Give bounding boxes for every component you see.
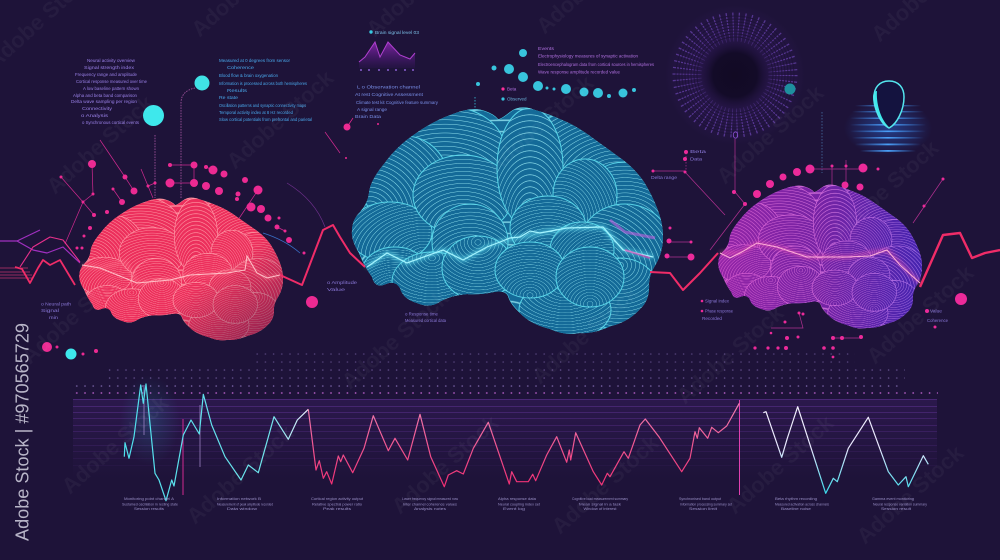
text block: top right of blue chain: Wave response amplitude recorded value <box>538 70 620 74</box>
waveform captions: Baseline noise <box>781 506 812 511</box>
text block: top left: Alpha and beta band comparison <box>73 93 137 98</box>
waveform captions: Measurement of peak amplitude recorded <box>217 502 273 506</box>
waveform captions: Event log <box>503 506 525 511</box>
text block: top centre: L o Observation channel <box>357 84 420 90</box>
text block: top left: Frequency range and amplitude <box>75 72 137 77</box>
waveform captions: Relative spectral power ratio <box>312 502 363 506</box>
pink node network: right brain <box>652 112 967 358</box>
waveform captions: Alpha response data <box>498 496 537 501</box>
waveform captions: Analysis notes <box>414 506 446 511</box>
watermark: Adobe Stock <box>722 410 839 519</box>
small text labels around brains: o Response time <box>405 312 439 316</box>
text block: top right of blue chain <box>538 46 655 74</box>
waveform captions <box>122 496 927 511</box>
watermark: Adobe Stock <box>57 390 174 499</box>
small text labels around brains: Measured cortical data <box>405 318 447 323</box>
text block: top centre-left: Oscillation patterns and synaptic connectivity maps <box>219 103 307 108</box>
waveform captions: Session results <box>134 506 164 511</box>
waveform captions: Beta rhythm recording <box>775 496 817 501</box>
right output wave <box>920 233 1000 287</box>
text block: top right of blue chain: Electrophysiology measures of synaptic activation <box>538 54 638 58</box>
text block: top centre: A signal range <box>357 107 387 112</box>
small text labels around brains: Data <box>690 156 703 162</box>
connector wave: blue to purple <box>650 253 718 290</box>
watermark: Adobe Stock <box>527 280 644 389</box>
waveform captions: Inter channel coherence values <box>403 502 457 506</box>
brain: red left <box>77 197 288 344</box>
text block: top centre-left: Blood flow & brain oxygenation <box>219 73 278 78</box>
text block: top left: Delta wave sampling per region <box>71 99 137 104</box>
text block: top left: Connectivity <box>82 106 113 111</box>
waveform captions: Measured activation across channels <box>775 502 829 506</box>
text block: top left: Signal strength index <box>84 65 135 70</box>
text block: top centre <box>355 84 439 119</box>
waveform captions: Lower frequency signal measured now <box>402 496 458 501</box>
brain: purple right <box>716 184 927 332</box>
waveform captions: Session limit <box>689 506 718 511</box>
waveform captions: Synchronised band output <box>679 496 722 501</box>
text block: top centre: At rest Cognitive Assessment <box>355 92 424 97</box>
brain: blue centre <box>348 106 671 340</box>
small text labels around brains: min <box>49 315 59 320</box>
watermark: Adobe Stock <box>337 285 454 394</box>
watermark: Adobe Stock <box>17 260 134 369</box>
text block: top left: Cortical response measured over time <box>76 79 147 84</box>
watermark: Adobe Stock <box>387 410 504 519</box>
watermark: Adobe Stock <box>547 430 664 539</box>
watermark: Adobe Stock <box>482 70 599 179</box>
shield icon with blue bars <box>844 80 932 156</box>
small text labels around brains: Value <box>930 308 943 314</box>
waveform captions: Session result <box>881 506 912 511</box>
stock image id: Adobe Stock | #970565729 <box>12 323 32 541</box>
waveform captions: Window of interest <box>584 506 617 511</box>
small text labels around brains: o Amplitude <box>327 280 358 285</box>
watermark: Adobe Stock <box>222 65 339 174</box>
white to cyan wave segment <box>763 407 928 493</box>
text block: top centre-left: Results <box>227 88 248 93</box>
text block: top left: A low baseline pattern shown <box>83 86 139 91</box>
dot matrix above the waveform <box>73 352 938 395</box>
text block: top left <box>71 58 147 125</box>
mini area chart <box>359 30 420 71</box>
waveform captions: Monitoring point channel A <box>124 496 174 501</box>
waveform captions: Peak results <box>323 506 351 511</box>
watermark: Adobe Stock <box>852 440 969 549</box>
watermark: Adobe Stock <box>827 135 944 244</box>
text block: top left: Neural activity overview <box>87 58 136 63</box>
waveform captions: Gamma event monitoring <box>872 496 914 501</box>
text block: top right of blue chain: Electroencephalogram data from cortical sources in hemispheres <box>538 62 655 67</box>
legend near blue chain: Observed <box>507 96 527 102</box>
legend near blue chain <box>501 86 527 102</box>
text block: top centre: Brain Data <box>355 114 382 119</box>
text block: top centre: Climate test kit Cognitive feature summary <box>356 100 439 105</box>
small text labels around brains: o Neural path <box>41 302 72 306</box>
legend near blue chain: Beta <box>507 86 517 92</box>
waveform captions: Mean signal in a task <box>579 502 621 506</box>
sunburst radial graphic <box>665 5 805 145</box>
text block: top centre-left: Measured at 0 degrees from sensor <box>219 58 290 63</box>
small teal sphere <box>784 84 796 94</box>
small text labels around brains: Phase response <box>705 308 734 314</box>
text block: top centre-left: Re state <box>219 95 238 100</box>
waveform captions: Information network B <box>217 496 261 501</box>
small text labels around brains: Signal index <box>705 298 730 304</box>
left chart band: horizontal grid lines <box>73 399 937 479</box>
waveform chart <box>120 375 928 501</box>
small text labels around brains: Coherence <box>927 318 949 323</box>
waveform captions: Cognitive load measurement summary <box>572 496 628 501</box>
watermark: Adobe Stock <box>862 260 979 369</box>
blue dot chain <box>475 49 636 108</box>
watermark: Adobe Stock <box>42 90 159 199</box>
pink node network: left brain <box>42 118 379 360</box>
cyan wave segment <box>124 384 308 501</box>
text block: top centre-left <box>219 58 312 122</box>
vertical markers <box>182 419 184 495</box>
waveform captions: Information processing summary set <box>680 502 733 506</box>
small text labels around brains: Signal <box>41 308 59 313</box>
small text labels around brains: Value <box>327 287 346 292</box>
waveform captions: Data window <box>227 506 257 511</box>
waveform captions: Neural response variation summary <box>873 502 927 506</box>
cyan callout circles with leader lines <box>143 76 210 198</box>
text block: top centre-left: Coherence <box>227 65 255 70</box>
small text labels around brains: Delta range <box>651 175 678 180</box>
text block: top centre-left: Information is processed across both hemispheres <box>219 81 308 86</box>
text block: top left: o Analysis <box>81 113 109 118</box>
small text labels around brains <box>41 149 949 323</box>
watermark: Adobe Stock <box>182 420 299 529</box>
waveform captions: Cortical region activity output <box>311 496 364 501</box>
glow behind first peak <box>120 375 180 465</box>
text block: top centre-left: Temporal activity index at 8 Hz recorded <box>219 110 293 115</box>
watermark: Adobe Stock <box>672 300 789 409</box>
waveform captions: Neural coupling index set <box>498 502 541 506</box>
pink wave segment <box>308 403 739 487</box>
mini area chart: Brain signal level 03 <box>375 30 420 35</box>
waveform captions: Sustained oscillation in resting state <box>122 502 179 506</box>
connector wave: red to blue <box>280 225 365 285</box>
text block: top left: o Synchronous cortical events <box>82 120 140 125</box>
small text labels around brains: Beta <box>690 149 707 154</box>
text block: top centre-left: Slow cortical potentials from prefrontal and parietal <box>219 117 312 122</box>
line waves: left input signals <box>0 230 80 285</box>
small text labels around brains: Recorded <box>702 316 723 321</box>
text block: top right of blue chain: Events <box>538 46 555 51</box>
watermark: Adobe Stock <box>712 80 829 189</box>
